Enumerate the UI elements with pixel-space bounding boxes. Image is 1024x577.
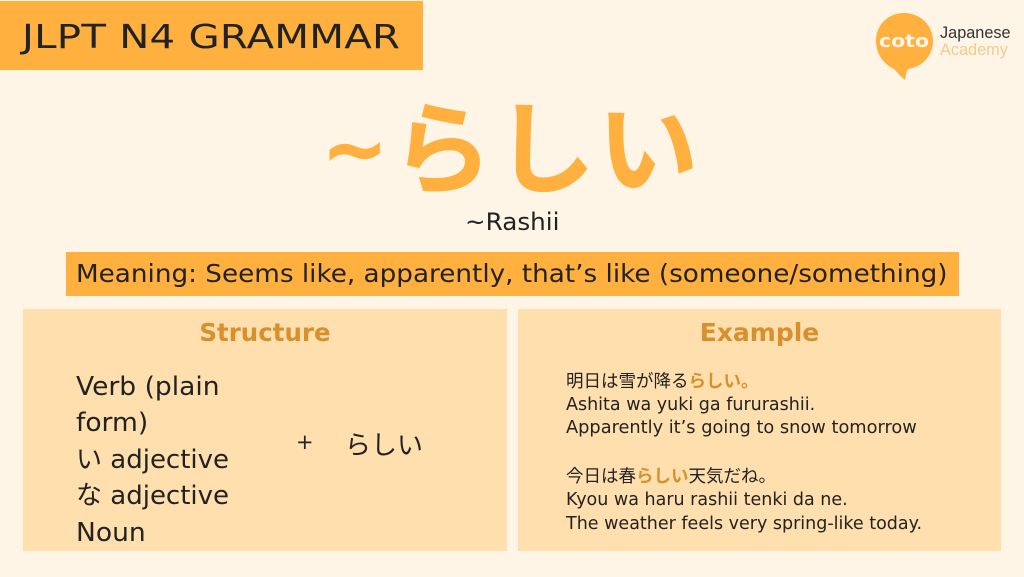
example 2 <box>566 463 922 534</box>
structure heading: Structure <box>199 318 331 347</box>
example 1: 明日は雪が降るらしい。 <box>566 368 758 393</box>
rashii suffix: らしい <box>345 425 423 462</box>
main heading: ~rashii <box>322 69 701 214</box>
structure word types list: Verb (plain <box>76 372 220 402</box>
title text: JLPT N4 GRAMMAR <box>22 17 400 56</box>
structure word types list: な adjective <box>76 475 229 512</box>
icon: speech bubble: coto <box>879 31 929 52</box>
structure word types list: form) <box>76 408 148 438</box>
example 2: 今日は春らしい天気だね。 <box>566 463 776 488</box>
icon: speech bubble <box>876 13 933 80</box>
structure word types list <box>76 372 229 548</box>
logo text: Academy: Academy <box>940 41 1008 59</box>
logo text: Japanese: Japanese <box>940 24 1011 42</box>
panel: structure <box>23 309 507 551</box>
example 2: The weather feels very spring-like today. <box>566 514 922 534</box>
rashii kana: らしい <box>392 69 701 214</box>
example heading: Example <box>700 318 819 347</box>
example 2: Kyou wa haru rashii tenki da ne. <box>566 490 848 510</box>
example 1 <box>566 368 917 438</box>
tilde: ~ <box>322 105 387 195</box>
title banner <box>0 1 423 70</box>
panel: example <box>518 309 1001 551</box>
example 1: Ashita wa yuki ga fururashii. <box>566 395 815 415</box>
plus sign: + <box>296 430 314 454</box>
romaji subtitle: ~Rashii <box>465 208 560 236</box>
structure word types list: Noun <box>76 518 146 548</box>
example 1: Apparently it’s going to snow tomorrow <box>566 418 917 438</box>
structure word types list: い adjective <box>76 439 229 476</box>
meaning banner <box>66 252 959 296</box>
logo: coto Japanese Academy <box>876 13 1011 80</box>
meaning text: Meaning: Seems like, apparently, that’s like (someone/something) <box>76 259 947 288</box>
